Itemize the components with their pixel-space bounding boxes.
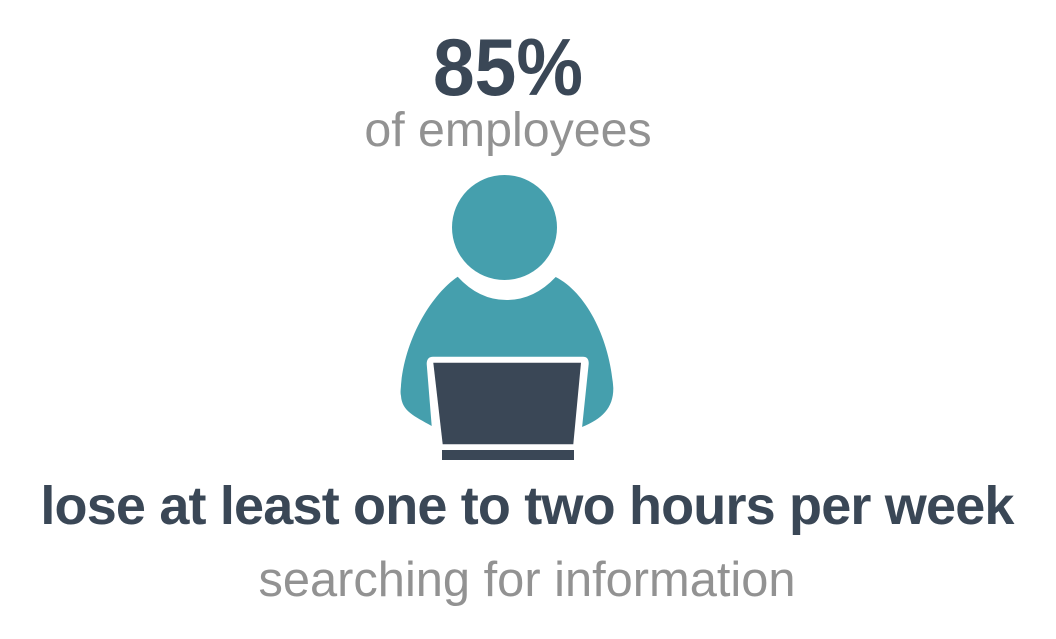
laptop base <box>442 450 574 460</box>
main statement: lose at least one to two hours per week <box>40 476 1014 536</box>
stat: 85%: 85% <box>433 23 583 113</box>
laptop screen <box>433 363 581 444</box>
body <box>401 277 613 440</box>
laptop frame <box>427 357 589 447</box>
supporting text: searching for information <box>258 553 796 607</box>
icon: person at laptop <box>400 175 614 460</box>
head <box>452 175 557 280</box>
subheading: of employees: of employees <box>364 103 652 157</box>
